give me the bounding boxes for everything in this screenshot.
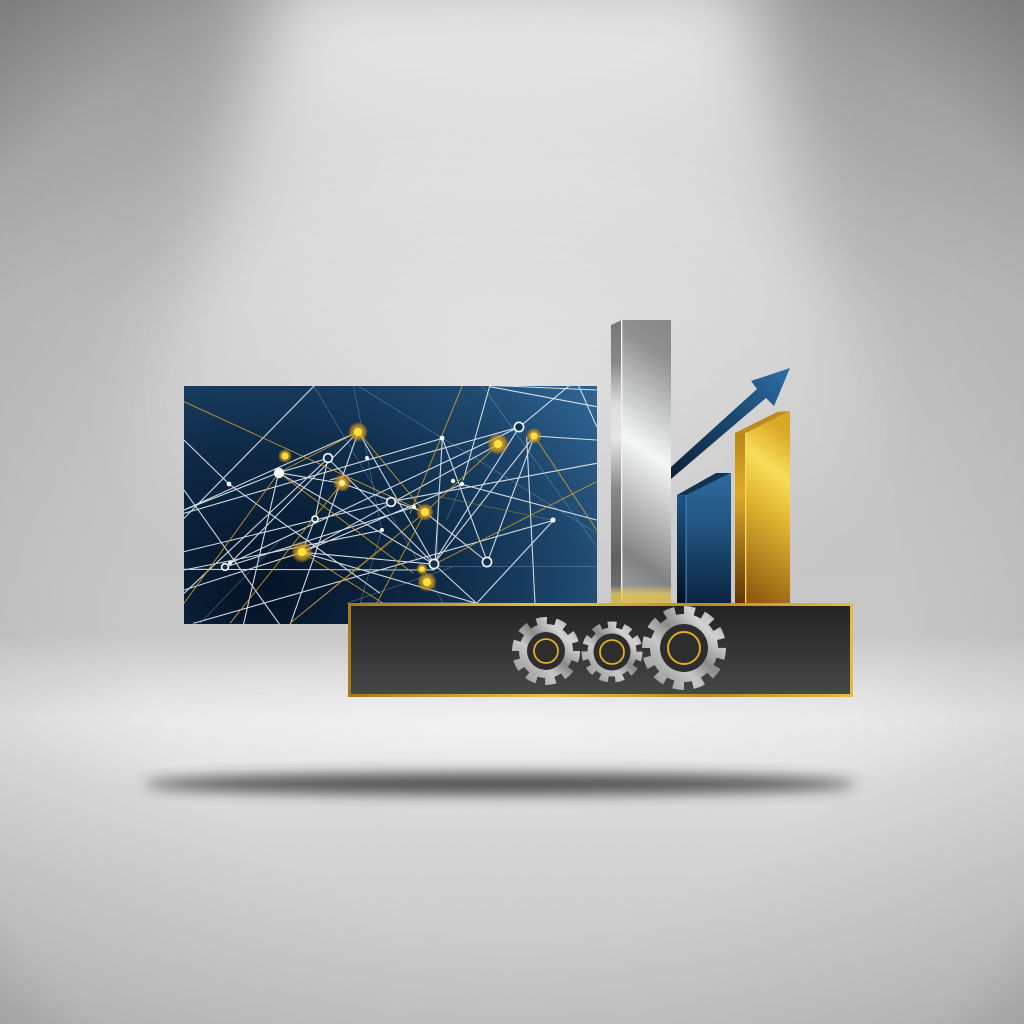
growth arrow [671,368,790,479]
gold bar [735,411,790,603]
base plate [350,604,852,696]
icon: gear right [646,610,722,686]
icon: gear middle [585,625,639,679]
ring network nodes [222,422,524,570]
blue bar [677,473,731,603]
white network nodes [227,436,556,565]
floating ground shadow [144,773,856,795]
panel: data network [184,385,597,625]
gold network nodes [278,422,542,592]
network lines [184,385,597,625]
bar chart [611,320,790,603]
icon: gear left [516,621,576,681]
silver bar [611,320,671,603]
base plate with gears [350,604,852,696]
